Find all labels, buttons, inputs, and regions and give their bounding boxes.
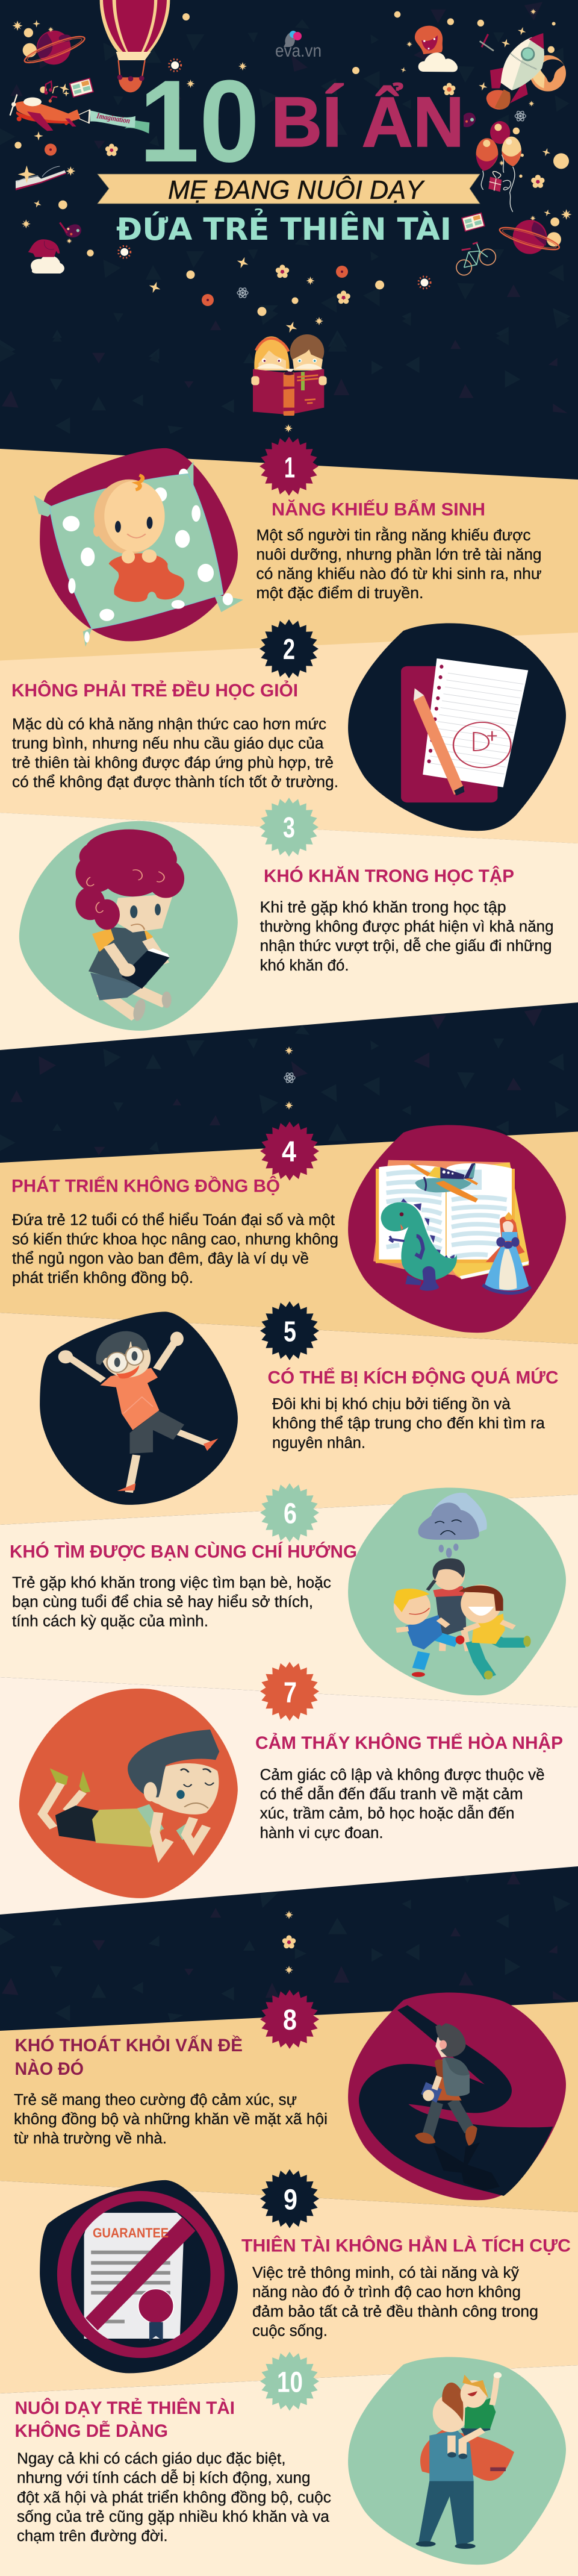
heading 8: KHÓ THOÁT KHỎI VẤN ĐỀ: [14, 2035, 243, 2055]
panel: item 7: [255, 1733, 563, 1842]
text 2: [12, 716, 338, 790]
text 7: Cảm giác cô lập và không được thuộc về: [260, 1766, 545, 1783]
text 3: khó khăn đó.: [260, 957, 349, 974]
subtitle: ĐỨA TRẺ THIÊN TÀI: ĐỨA TRẺ THIÊN TÀI: [116, 208, 452, 248]
text 8: từ nhà trường về nhà.: [14, 2130, 167, 2147]
panel: item 9: [241, 2235, 571, 2339]
text 1: [256, 527, 542, 602]
badge 10: 10: [277, 2367, 303, 2399]
title: BÍ ẨN: BÍ ẨN: [271, 82, 464, 162]
badge 9: 9: [284, 2184, 297, 2216]
text 9: năng nào đó ở trình độ cao hơn không: [252, 2284, 521, 2301]
hero left illustrations: [10, 0, 181, 274]
text 7: có thể dẫn đến đấu tranh về mặt cảm: [260, 1786, 523, 1802]
illustration: sad boy lying down: [19, 1689, 238, 1898]
panel: item 6: [10, 1542, 357, 1630]
badge 2: [259, 619, 319, 678]
heading 8: [14, 2035, 243, 2079]
text 6: Trẻ gặp khó khăn trong việc tìm bạn bè, hoặc: [12, 1574, 331, 1591]
heading 2: KHÔNG PHẢI TRẺ ĐỀU HỌC GIỎI: [11, 680, 298, 701]
badge 6: 6: [284, 1498, 297, 1530]
text 7: hành vi cực đoan.: [260, 1825, 384, 1842]
icon: small stars and dots left: [13, 20, 181, 258]
ribbon banner: MẸ ĐANG NUÔI DẠY: [168, 175, 425, 205]
text 7: [260, 1766, 545, 1842]
badge 7: [260, 1662, 319, 1721]
icon: monster on cloud: [415, 26, 458, 72]
icon: pencil and ruler: [480, 34, 494, 51]
icon: bicycle: [456, 242, 496, 275]
text 7: xúc, trầm cảm, bỏ học hoặc dẫn đến: [260, 1805, 515, 1822]
icon: balloons and gift: [476, 121, 521, 212]
icon: music notes: [40, 81, 58, 102]
dinosaur: [381, 1198, 457, 1291]
text 6: tính cách kỳ quặc của mình.: [12, 1613, 208, 1630]
badge 4: [260, 1122, 319, 1181]
heading 10: NUÔI DẠY TRẺ THIÊN TÀI: [14, 2398, 235, 2418]
text 9: Việc trẻ thông minh, có tài năng và kỹ: [252, 2265, 519, 2281]
illustration: boy walking on road: [348, 1993, 566, 2200]
ribbon banner: [98, 174, 480, 205]
text 6: bạn cùng tuổi để chia sẻ hay hiểu sở thích,: [12, 1593, 313, 1610]
text 8: Trẻ sẽ mang theo cường độ cảm xúc, sự: [14, 2092, 297, 2109]
text 10: Ngay cả khi có cách giáo dục đặc biệt,: [17, 2451, 285, 2468]
badge 8: 8: [283, 2004, 297, 2036]
text 8: không đồng bộ và những khăn về mặt xã hội: [14, 2111, 328, 2128]
badge 6: [260, 1483, 319, 1542]
text 3: Khi trẻ gặp khó khăn trong học tập: [260, 899, 506, 916]
number badges: [259, 437, 319, 2411]
badge 9: [260, 2169, 319, 2228]
illustration: no-guarantee document: [40, 2180, 238, 2373]
heading 6: KHÓ TÌM ĐƯỢC BẠN CÙNG CHÍ HƯỚNG: [10, 1542, 357, 1562]
illustration: jumping boy with glasses: [40, 1311, 238, 1505]
icon: hot air balloon: [100, 0, 170, 92]
panel: item 4: [11, 1176, 338, 1287]
badge 2: 2: [283, 634, 295, 666]
badge 1: [259, 437, 319, 496]
badge 8: [260, 1990, 319, 2049]
text 1: một đặc điểm di truyền.: [256, 585, 424, 602]
icon: open book: [69, 78, 94, 98]
heading 7: CẢM THẤY KHÔNG THỂ HÒA NHẬP: [255, 1733, 563, 1753]
heading 1: NĂNG KHIẾU BẨM SINH: [272, 499, 485, 519]
text 9: đảm bảo tất cả trẻ đều thành công trong: [252, 2303, 538, 2320]
text 9: cuộc sống.: [252, 2322, 328, 2339]
heading 9: THIÊN TÀI KHÔNG HẲN LÀ TÍCH CỰC: [241, 2235, 571, 2256]
eva.vn logo: [275, 31, 322, 61]
panel: item 3: [260, 866, 554, 974]
panel: item 8: [14, 2035, 328, 2147]
title: 10: 10: [139, 56, 259, 187]
heading 5: CÓ THỂ BỊ KÍCH ĐỘNG QUÁ MỨC: [267, 1367, 559, 1387]
heading 10: KHÔNG DỄ DÀNG: [14, 2421, 168, 2441]
text 5: không thể tập trung cho đến khi tìm ra: [272, 1415, 545, 1432]
heading 10: [14, 2398, 235, 2441]
heading 3: KHÓ KHĂN TRONG HỌC TẬP: [264, 866, 514, 886]
icon: airplane with banner: [10, 95, 149, 134]
icon: stars and dots right: [394, 8, 572, 227]
text 10: [17, 2451, 331, 2545]
text 4: [12, 1211, 338, 1287]
text 4: Đứa trẻ 12 tuổi có thể hiểu Toán đại số và một: [12, 1211, 335, 1228]
text 1: Một số người tin rằng năng khiếu được: [256, 527, 531, 544]
text 5: nguyên nhân.: [272, 1434, 365, 1451]
icon: elephant on cloud: [28, 239, 64, 274]
illustration: curly-haired child reading: [19, 821, 238, 1031]
banner text: Imagination: Imagination: [96, 111, 131, 125]
text 5: [272, 1396, 545, 1451]
panel: item 5: [267, 1367, 559, 1451]
icon: planet left: [22, 31, 87, 67]
icon: two kids reading a book: [251, 334, 327, 416]
text 1: nuôi dưỡng, nhưng phần lớn trẻ tài năng: [256, 546, 542, 563]
icon: palette: [60, 222, 81, 237]
panel: item 2: [11, 680, 338, 790]
princess: [483, 1212, 531, 1294]
badge 5: [260, 1301, 319, 1360]
text 4: thể ngủ ngon vào ban đêm, đây là ví dụ về: [12, 1251, 309, 1268]
text 2: trung bình, nhưng nếu nhu cầu giáo dục của: [12, 736, 324, 752]
text 10: nhưng với tính cách dễ bị kích động, xung: [17, 2469, 311, 2487]
badge 4: 4: [282, 1136, 296, 1168]
badge 3: 3: [283, 812, 295, 844]
hero right illustrations: [394, 8, 572, 275]
illustration: father carrying child: [348, 2357, 566, 2565]
icon: palette behind title: [464, 113, 476, 127]
badge 10: [260, 2352, 319, 2411]
text 10: sống của trẻ cũng gặp nhiều khó khăn và va: [17, 2509, 330, 2525]
toy plane: [409, 1163, 478, 1202]
background triangles: [0, 2, 571, 2021]
divider ornaments: [282, 1046, 296, 1974]
text 9: [252, 2265, 538, 2339]
text 3: [260, 899, 554, 974]
text 4: phát triển không đồng bộ.: [12, 1270, 193, 1287]
panel: item 10: [14, 2398, 331, 2545]
icon: open book right: [461, 212, 485, 232]
illustration: paper with D+ grade: [348, 623, 566, 831]
icon: rocket: [486, 33, 544, 110]
icon: flying book and star: [16, 166, 66, 190]
text 4: só kiến thức khoa học nâng cao, nhưng không: [12, 1231, 338, 1248]
text 2: có thể không đạt được thành tích tốt ở trường.: [12, 774, 338, 790]
text 10: chạm trên đường đời.: [17, 2528, 168, 2545]
text 6: [12, 1574, 331, 1630]
panel: item 1: [256, 499, 542, 602]
text 3: nhận thức vượt trội, dễ che giấu đi những: [260, 937, 552, 955]
text 2: Mặc dù có khả năng nhận thức cao hơn mức: [12, 716, 326, 733]
hero centre decorations: [147, 13, 430, 433]
hero header: [10, 0, 572, 433]
text 3: thường không được phát hiện vì khả năng: [260, 918, 554, 935]
text 8: [14, 2092, 328, 2147]
badge 1: 1: [284, 452, 295, 484]
text 1: có năng khiếu nào đó từ khi sinh ra, như: [256, 566, 542, 583]
heading 4: PHÁT TRIỂN KHÔNG ĐỒNG BỘ: [11, 1176, 280, 1196]
illustration: baby on pillow: [34, 448, 243, 647]
GUARANTEE label: GUARANTEE: [93, 2225, 169, 2240]
text 10: đột xã hội và phát triển không đồng bộ, cuộc: [17, 2489, 331, 2506]
open book: [373, 1160, 529, 1279]
badge 7: 7: [284, 1677, 297, 1709]
badge 5: 5: [284, 1316, 296, 1348]
text 5: Đôi khi bị khó chịu bởi tiếng ồn và: [272, 1396, 511, 1413]
illustration: book with plane, dinosaur and princess: [348, 1125, 566, 1333]
text 2: trẻ thiên tài không được đáp ứng phù hợp, trẻ: [12, 755, 334, 772]
badge 3: [259, 798, 319, 857]
illustration: kids with sad cloud: [348, 1488, 566, 1695]
icon: globe: [530, 55, 566, 92]
heading 8: NÀO ĐÓ: [14, 2059, 84, 2079]
icon: planet right: [498, 220, 561, 254]
eva.vn logo: eva.vn: [275, 41, 322, 61]
